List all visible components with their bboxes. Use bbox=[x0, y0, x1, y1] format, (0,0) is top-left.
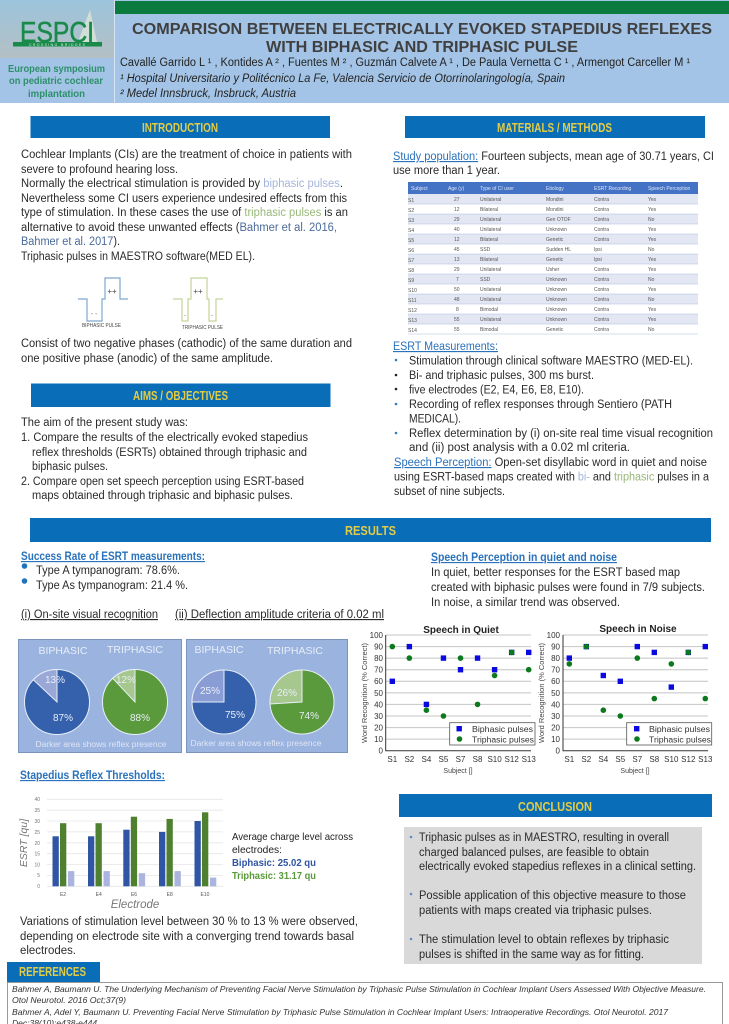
table: subjects: 55 bbox=[454, 317, 460, 323]
chart: speech in quiet: 80 bbox=[374, 654, 384, 663]
chart: speech in quiet bbox=[360, 625, 536, 775]
table: subjects: 45 bbox=[454, 247, 460, 253]
text: speech perception results: In quiet, better responses for the ESRT based map bbox=[431, 567, 680, 579]
diagram: triphasic pulse: ++ bbox=[193, 287, 203, 296]
pie: biphasic 87 percent bbox=[24, 669, 90, 734]
heading: conclusion: CONCLUSION bbox=[518, 800, 592, 814]
conclusion point 3: pulses is shifted in the same way as for fitting. bbox=[419, 949, 644, 961]
legend: Biphasic pulses bbox=[472, 725, 533, 734]
chart: speech in quiet: 20 bbox=[374, 724, 384, 732]
pie: biphasic 75 percent bbox=[192, 670, 256, 734]
chart: speech in quiet: 0 bbox=[379, 747, 384, 756]
heading: stapedius reflex thresholds: Stapedius Reflex Thresholds: bbox=[20, 770, 165, 782]
title: COMPARISON BETWEEN ELECTRICALLY EVOKED STAPEDIUS REFLEXES bbox=[132, 21, 712, 38]
chart: speech in quiet: Speech in Quiet bbox=[423, 625, 499, 636]
conclusion point 2 bbox=[410, 890, 686, 917]
panel: conclusion text bbox=[404, 827, 702, 964]
table: subjects: Mondini bbox=[546, 207, 564, 213]
text: average charge level bbox=[232, 831, 353, 882]
table: subjects: Bilateral bbox=[480, 207, 498, 213]
conclusion point 1: charged balanced pulses, are feasible to obtain bbox=[419, 847, 649, 859]
text: average charge level: Triphasic: 31.17 qu bbox=[232, 870, 316, 882]
chart: ESRT by electrode: 40 bbox=[34, 797, 40, 803]
text: aims: biphasic pulses. bbox=[32, 461, 108, 473]
chart: speech in noise: 50 bbox=[551, 689, 561, 698]
table: subjects: Unknown bbox=[546, 277, 567, 283]
pie: triphasic 88 percent: 12% bbox=[116, 675, 136, 686]
table: subjects: S4 bbox=[408, 228, 414, 234]
text: aims: The aim of the present study was: bbox=[21, 417, 188, 429]
table: subjects: Unilateral bbox=[480, 217, 501, 223]
table: subjects: Unilateral bbox=[480, 297, 501, 303]
affiliations: ¹ Hospital Universitario y Politécnico La Fe, Valencia Servicio de Otorrinolaringología, Spain bbox=[120, 73, 565, 85]
table: subjects: Contra bbox=[594, 297, 609, 303]
pie: biphasic 87 percent: 87% bbox=[53, 713, 73, 724]
text: ESRT measurements: Reflex determination by (i) on-site real time visual recognition bbox=[409, 428, 713, 440]
text: speech perception results: created with biphasic pulses were found in 7/9 subjects. bbox=[431, 582, 705, 594]
affiliations: ² Medel Innsbruck, Insbruck, Austria bbox=[120, 88, 296, 100]
chart: speech in quiet: 100 bbox=[370, 631, 384, 640]
authors: Cavallé Garrido L ¹ , Kontides A ² , Fuentes M ² , Guzmán Calvete A ¹ , De Paula Vernetta C ¹ , Armengot Carceller M ¹ bbox=[120, 57, 690, 69]
table: subjects: Type of CI user bbox=[480, 186, 514, 192]
table: subjects: S10 bbox=[408, 288, 417, 294]
chart: ESRT by electrode: ESRT [qu] bbox=[18, 818, 30, 867]
heading: introduction: INTRODUCTION bbox=[142, 121, 218, 135]
chart: ESRT by electrode: Electrode bbox=[111, 899, 159, 911]
symposium label: on pediatric cochlear bbox=[9, 75, 103, 87]
table: subjects: Unilateral bbox=[480, 227, 501, 233]
table: subjects: 29 bbox=[454, 217, 460, 223]
table: subjects: Yes bbox=[648, 237, 657, 243]
panel: on-site visual recognition pies bbox=[18, 640, 182, 752]
chart: ESRT by electrode: E10 bbox=[201, 892, 210, 898]
text: speech perception method bbox=[394, 457, 710, 498]
table: subjects: 50 bbox=[454, 287, 460, 293]
table: subjects: Yes bbox=[648, 307, 657, 313]
table: subjects: Contra bbox=[594, 327, 609, 333]
title: WITH BIPHASIC AND TRIPHASIC PULSE bbox=[266, 39, 578, 56]
table: subjects: Ipsi bbox=[594, 247, 602, 253]
table: subjects: 55 bbox=[454, 327, 460, 333]
text: success rate bbox=[21, 551, 205, 592]
table: subjects: Unknown bbox=[546, 307, 567, 313]
table: subjects: Contra bbox=[594, 277, 609, 283]
text: aims: reflex thresholds (ESRTs) obtained through triphasic and bbox=[32, 447, 307, 459]
text: speech perception method: using ESRT-based maps created with bi- and triphasic pulses in a bbox=[394, 472, 710, 484]
table: subjects: Bilateral bbox=[480, 257, 498, 263]
table: subjects: Yes bbox=[648, 197, 657, 203]
text: speech perception results bbox=[431, 552, 705, 609]
chart: ESRT by electrode: E4 bbox=[96, 892, 102, 898]
conclusion point 3: The stimulation level to obtain reflexes by triphasic bbox=[419, 934, 669, 946]
chart: speech in noise: S4 bbox=[598, 755, 609, 764]
chart: speech in quiet: S1 bbox=[387, 755, 398, 764]
text: introduction bbox=[21, 149, 352, 263]
table: subjects: Contra bbox=[594, 267, 609, 273]
text: introduction: Normally the electrical stimulation is provided by biphasic pulses. bbox=[21, 178, 343, 190]
table: subjects: Mondini bbox=[546, 197, 564, 203]
text: ESRT measurements: Bi- and triphasic pulses, 300 ms burst. bbox=[409, 370, 594, 382]
subheadings: criteria bbox=[21, 609, 384, 621]
text: study population bbox=[393, 151, 714, 177]
table: subjects: Contra bbox=[594, 197, 609, 203]
table: subjects: Unknown bbox=[546, 287, 567, 293]
conclusion point 1: electrically evoked stapedius reflexes in a clinical setting. bbox=[419, 861, 696, 873]
diagram: triphasic pulse: - bbox=[211, 313, 213, 319]
table: subjects: Unknown bbox=[546, 227, 567, 233]
text: speech perception method: subset of nine subjects. bbox=[394, 486, 505, 498]
table: subjects: Bimodal bbox=[480, 327, 498, 333]
diagram: biphasic pulse bbox=[78, 278, 128, 329]
table: subjects: Yes bbox=[648, 227, 657, 233]
chart: speech in quiet: 10 bbox=[374, 735, 384, 744]
chart: speech in quiet: S13 bbox=[522, 755, 536, 764]
pie: biphasic 87 percent: 13% bbox=[45, 675, 65, 686]
table: subjects: S2 bbox=[408, 208, 414, 214]
table: subjects: Yes bbox=[648, 317, 657, 323]
legend bbox=[627, 723, 712, 745]
heading: results bbox=[30, 518, 711, 542]
chart: speech in noise: S10 bbox=[664, 755, 679, 764]
text: success rate: Success Rate of ESRT measurements: bbox=[21, 551, 205, 563]
diagram: triphasic pulse: TRIPHASIC PULSE bbox=[182, 325, 224, 331]
chart: speech in noise: 80 bbox=[551, 654, 561, 663]
chart: speech in quiet: S10 bbox=[487, 755, 502, 764]
text: introduction: Bahmer et al. 2017). bbox=[21, 236, 120, 248]
table: subjects: No bbox=[648, 297, 655, 303]
title bbox=[132, 21, 712, 56]
table: subjects: Unknown bbox=[546, 317, 567, 323]
chart: speech in noise: S1 bbox=[564, 755, 575, 764]
heading: aims bbox=[31, 384, 330, 407]
conclusion point 1 bbox=[410, 832, 696, 873]
diagram: biphasic pulse: - - bbox=[91, 311, 98, 318]
table: subjects: ESRT Recording bbox=[594, 186, 632, 192]
diagram: triphasic pulse: - bbox=[184, 313, 186, 319]
chart: speech in noise: 100 bbox=[547, 631, 561, 640]
text: stimulation variation: Variations of stimulation level between 30 % to 13 % were observed, bbox=[20, 916, 358, 928]
chart: speech in quiet: Word Recognition (% Correct) bbox=[360, 643, 369, 743]
text: ESRT measurements: and (ii) post analysis with a 0.02 ml criteria. bbox=[409, 442, 630, 454]
table: subjects: Contra bbox=[594, 237, 609, 243]
symposium label bbox=[8, 63, 105, 100]
heading: materials and methods: MATERIALS / METHODS bbox=[497, 121, 612, 135]
chart: ESRT by electrode: 30 bbox=[34, 819, 40, 825]
table: subjects: S11 bbox=[408, 298, 417, 304]
panel: references: Otol Neurotol. 2016 Oct;37(9) bbox=[12, 995, 126, 1005]
table: subjects bbox=[408, 182, 698, 334]
conclusion point 3 bbox=[410, 934, 669, 961]
chart: ESRT by electrode: 0 bbox=[37, 884, 40, 890]
chart: ESRT by electrode: 10 bbox=[34, 862, 40, 868]
diagram: biphasic pulse: ++ bbox=[107, 287, 117, 296]
table: subjects: Yes bbox=[648, 287, 657, 293]
heading: conclusion bbox=[399, 794, 712, 817]
chart: ESRT by electrode bbox=[18, 797, 223, 911]
table: subjects: No bbox=[648, 327, 655, 333]
table: subjects: Yes bbox=[648, 207, 657, 213]
chart: ESRT by electrode: E6 bbox=[131, 892, 137, 898]
table: subjects: S7 bbox=[408, 258, 414, 264]
chart: speech in quiet: S4 bbox=[422, 755, 432, 764]
green title stripe bbox=[115, 1, 729, 14]
chart: ESRT by electrode: 15 bbox=[34, 852, 40, 858]
text: pulse description: one positive phase (anodic) of the same amplitude. bbox=[21, 353, 273, 365]
pie: biphasic 75 percent: 75% bbox=[225, 710, 245, 721]
logo: ESPCI bbox=[0, 0, 114, 58]
table: subjects: Gen OTOF bbox=[546, 217, 571, 223]
text: study population: use more than 1 year. bbox=[393, 165, 500, 177]
text: introduction: type of stimulation. In these cases the use of triphasic pulses is an bbox=[21, 207, 348, 219]
text: aims: maps obtained through triphasic and biphasic pulses. bbox=[32, 490, 293, 502]
table: subjects: 48 bbox=[454, 297, 460, 303]
text: average charge level: Average charge level across bbox=[232, 831, 353, 843]
heading: results: RESULTS bbox=[345, 524, 396, 538]
table: subjects: Bimodal bbox=[480, 307, 498, 313]
table: subjects: Unknown bbox=[546, 297, 567, 303]
panel: references bbox=[8, 982, 722, 1024]
text: introduction: Cochlear Implants (CIs) are the treatment of choice in patients with bbox=[21, 149, 352, 161]
table: subjects: S5 bbox=[408, 238, 414, 244]
table: subjects: S9 bbox=[408, 278, 414, 284]
subheadings: criteria: (i) On-site visual recognition bbox=[21, 609, 158, 621]
text: stimulation variation bbox=[20, 916, 358, 957]
heading: references: REFERENCES bbox=[19, 965, 86, 979]
table: subjects: Ipsi bbox=[594, 257, 602, 263]
chart: speech in noise: Subject [] bbox=[620, 768, 650, 775]
chart: speech in noise: 20 bbox=[551, 724, 561, 732]
table: subjects: SSD bbox=[480, 247, 491, 253]
pie: triphasic 74 percent bbox=[270, 670, 334, 734]
conclusion point 2: patients with maps created via triphasic pulses. bbox=[419, 905, 652, 917]
conclusion point 1: Triphasic pulses as in MAESTRO, resulting in overall bbox=[419, 832, 669, 844]
chart: speech in noise: 30 bbox=[551, 712, 561, 721]
chart: speech in quiet: 60 bbox=[374, 677, 384, 686]
legend: Biphasic pulses bbox=[649, 725, 710, 734]
text: aims: 2. Compare open set speech perception using ESRT-based bbox=[21, 476, 304, 488]
text: introduction: Triphasic pulses in MAESTRO software(MED EL). bbox=[21, 251, 255, 263]
pie: triphasic 88 percent bbox=[102, 669, 168, 734]
chart: ESRT by electrode: E8 bbox=[167, 892, 173, 898]
chart: speech in quiet: 30 bbox=[374, 712, 384, 721]
chart: speech in noise: 70 bbox=[551, 666, 561, 675]
conclusion point 2: Possible application of this objective measure to those bbox=[419, 890, 686, 902]
subheadings: criteria: (ii) Deflection amplitude criteria of 0.02 ml bbox=[175, 609, 384, 621]
legend bbox=[450, 723, 535, 745]
table: subjects: Unilateral bbox=[480, 267, 501, 273]
panel: deflection amplitude pies: BIPHASIC bbox=[194, 644, 244, 656]
table: subjects: S3 bbox=[408, 218, 414, 224]
heading: aims: AIMS / OBJECTIVES bbox=[133, 389, 228, 403]
heading: introduction bbox=[30, 116, 330, 138]
heading: materials and methods bbox=[405, 116, 705, 138]
table: subjects: Genetic bbox=[546, 327, 564, 333]
panel: deflection amplitude pies bbox=[186, 640, 348, 752]
chart: ESRT by electrode: 5 bbox=[37, 873, 40, 879]
chart: speech in quiet: S12 bbox=[505, 755, 519, 764]
pie: triphasic 74 percent: 74% bbox=[299, 711, 319, 722]
text: introduction: Nevertheless some CI users experience undesired effects from this bbox=[21, 193, 347, 205]
chart: speech in quiet: 70 bbox=[374, 666, 384, 675]
table: subjects: Contra bbox=[594, 287, 609, 293]
text: introduction: alternative to avoid these unwanted effects (Bahmer et al. 2016, bbox=[21, 222, 337, 234]
table: subjects: 27 bbox=[454, 197, 460, 203]
pie: triphasic 88 percent: 88% bbox=[130, 713, 150, 724]
chart: speech in noise: Word Recognition (% Correct) bbox=[537, 643, 546, 743]
table: subjects: Genetic bbox=[546, 257, 564, 263]
table: subjects: S14 bbox=[408, 328, 417, 334]
chart: speech in quiet: 40 bbox=[374, 700, 384, 709]
text: pulse description bbox=[21, 338, 352, 365]
chart: speech in quiet: 50 bbox=[374, 689, 384, 698]
diagram: biphasic pulse: BIPHASIC PULSE bbox=[82, 323, 122, 329]
table: subjects: Sudden HL bbox=[546, 247, 571, 253]
chart: ESRT by electrode: 25 bbox=[34, 830, 40, 836]
diagram: triphasic pulse bbox=[173, 278, 224, 331]
chart: speech in noise: S2 bbox=[581, 755, 592, 764]
table: subjects: 29 bbox=[454, 267, 460, 273]
table: subjects: 12 bbox=[454, 237, 460, 243]
affiliations bbox=[120, 73, 565, 100]
chart: speech in noise: S7 bbox=[632, 755, 643, 764]
table: subjects: 8 bbox=[456, 307, 459, 313]
table: subjects: Contra bbox=[594, 217, 609, 223]
legend: Triphasic pulses bbox=[472, 736, 534, 744]
table: subjects: No bbox=[648, 247, 655, 253]
chart: speech in quiet: S8 bbox=[473, 755, 483, 764]
table: subjects: S6 bbox=[408, 248, 414, 254]
table: subjects: No bbox=[648, 217, 655, 223]
chart: ESRT by electrode: E2 bbox=[60, 892, 66, 898]
table: subjects: S1 bbox=[408, 198, 414, 204]
chart: speech in noise: S5 bbox=[615, 755, 626, 764]
symposium label: European symposium bbox=[8, 63, 105, 75]
chart: speech in noise: S13 bbox=[698, 755, 713, 764]
chart: speech in noise: Speech in Noise bbox=[599, 624, 677, 635]
table: subjects: Contra bbox=[594, 207, 609, 213]
text: pulse description: Consist of two negative phases (cathodic) of the same duration and bbox=[21, 338, 352, 350]
logo: ESPCI: CROSSING BRIDGES bbox=[29, 43, 86, 47]
chart: speech in noise bbox=[537, 624, 713, 775]
text: success rate: Type As tympanogram: 21.4 %. bbox=[36, 580, 188, 592]
text: ESRT measurements: five electrodes (E2, E4, E6, E8, E10). bbox=[409, 384, 584, 396]
header band bbox=[0, 0, 729, 103]
table: subjects: Genetic bbox=[546, 237, 564, 243]
table: subjects: S8 bbox=[408, 268, 414, 274]
legend: Triphasic pulses bbox=[649, 736, 711, 744]
chart: ESRT by electrode: 35 bbox=[34, 808, 40, 814]
chart: ESRT by electrode: 20 bbox=[34, 841, 40, 847]
table: subjects: 13 bbox=[454, 257, 460, 263]
text: speech perception method: Speech Perception: Open-set disyllabic word in quiet and noise bbox=[394, 457, 707, 469]
panel: on-site visual recognition pies: Darker area shows reflex presence bbox=[36, 739, 167, 749]
table: subjects: Etiology bbox=[546, 186, 564, 192]
text: aims bbox=[21, 417, 308, 502]
chart: speech in noise: 10 bbox=[551, 735, 561, 744]
text: speech perception results: Speech Perception in quiet and noise bbox=[431, 552, 617, 564]
table: subjects: Contra bbox=[594, 307, 609, 313]
panel: on-site visual recognition pies: BIPHASIC bbox=[38, 645, 88, 657]
table: subjects: S12 bbox=[408, 308, 417, 314]
table: subjects: Speech Perception bbox=[648, 186, 690, 192]
text: ESRT measurements: Stimulation through clinical software MAESTRO (MED-EL). bbox=[409, 356, 693, 368]
chart: speech in noise: 40 bbox=[551, 700, 561, 709]
text: stimulation variation: depending on electrode site with a converging trend towards basal bbox=[20, 931, 354, 943]
chart: speech in noise: 60 bbox=[551, 677, 561, 686]
panel: references: Bahmer A, Adel Y, Baumann U. Preventing Facial Nerve Stimulation by Triphasic Pulse Stimulation in Cochlear Implant Users: Intraoperative Recordings. Otol Neurotol. 2017 bbox=[12, 1007, 668, 1017]
panel: deflection amplitude pies: TRIPHASIC bbox=[267, 645, 323, 657]
table: subjects: 12 bbox=[454, 207, 460, 213]
table: subjects: Unilateral bbox=[480, 197, 501, 203]
chart: speech in quiet: Subject [] bbox=[443, 768, 473, 775]
text: ESRT measurements: MEDICAL). bbox=[409, 414, 461, 426]
pie: triphasic 74 percent: 26% bbox=[277, 688, 297, 699]
text: introduction: severe to profound hearing loss. bbox=[21, 164, 178, 176]
text: aims: 1. Compare the results of the electrically evoked stapedius bbox=[21, 432, 308, 444]
table: subjects: Age (y) bbox=[448, 186, 464, 192]
panel: on-site visual recognition pies: TRIPHASIC bbox=[107, 644, 163, 656]
table: subjects: Usher bbox=[546, 267, 560, 273]
table: subjects: Unilateral bbox=[480, 317, 501, 323]
table: subjects: Subject bbox=[411, 186, 428, 192]
text: ESRT measurements: ESRT Measurements: bbox=[393, 341, 498, 353]
panel: references: Bahmer A, Baumann U. The Underlying Mechanism of Preventing Facial Nerve Stimulation by Triphasic Pulse Stimulation in Cochlear Implant Users Assessed With Objective Measure. bbox=[12, 984, 706, 994]
chart: speech in noise: S12 bbox=[681, 755, 696, 764]
table: subjects: Yes bbox=[648, 257, 657, 263]
text: speech perception results: In noise, a similar trend was observed. bbox=[431, 597, 620, 609]
chart: speech in quiet: S2 bbox=[404, 755, 415, 764]
logo: ESPCI: ESPCI bbox=[20, 17, 94, 49]
text: average charge level: Biphasic: 25.02 qu bbox=[232, 857, 316, 869]
chart: speech in noise: S8 bbox=[649, 755, 660, 764]
chart: speech in noise: 90 bbox=[551, 642, 561, 652]
panel: deflection amplitude pies: Darker area shows reflex presence bbox=[190, 738, 322, 748]
chart: speech in quiet: 90 bbox=[374, 642, 384, 652]
chart: speech in quiet: S5 bbox=[439, 755, 449, 764]
table: subjects: SSD bbox=[480, 277, 491, 283]
table: subjects: Contra bbox=[594, 317, 609, 323]
text: average charge level: electrodes: bbox=[232, 844, 282, 856]
text: stimulation variation: electrodes. bbox=[20, 945, 76, 957]
table: subjects: Unilateral bbox=[480, 287, 501, 293]
table: subjects: Bilateral bbox=[480, 237, 498, 243]
table: subjects: 40 bbox=[454, 227, 460, 233]
pie: biphasic 75 percent: 25% bbox=[200, 686, 220, 697]
table: subjects: Yes bbox=[648, 267, 657, 273]
table: subjects: 7 bbox=[456, 277, 459, 283]
table: subjects: S13 bbox=[408, 318, 417, 324]
text: success rate: Type A tympanogram: 78.6%. bbox=[36, 565, 180, 577]
text: study population: Study population: Fourteen subjects, mean age of 30.71 years, CI bbox=[393, 151, 714, 163]
symposium label: implantation bbox=[28, 88, 85, 100]
chart: speech in noise: 0 bbox=[556, 747, 561, 756]
heading: references bbox=[7, 962, 100, 982]
table: subjects: No bbox=[648, 277, 655, 283]
chart: speech in quiet: S7 bbox=[456, 755, 466, 764]
text: ESRT measurements bbox=[393, 341, 713, 454]
text: ESRT measurements: Recording of reflex responses through Sentiero (PATH bbox=[409, 399, 672, 411]
table: subjects: Contra bbox=[594, 227, 609, 233]
